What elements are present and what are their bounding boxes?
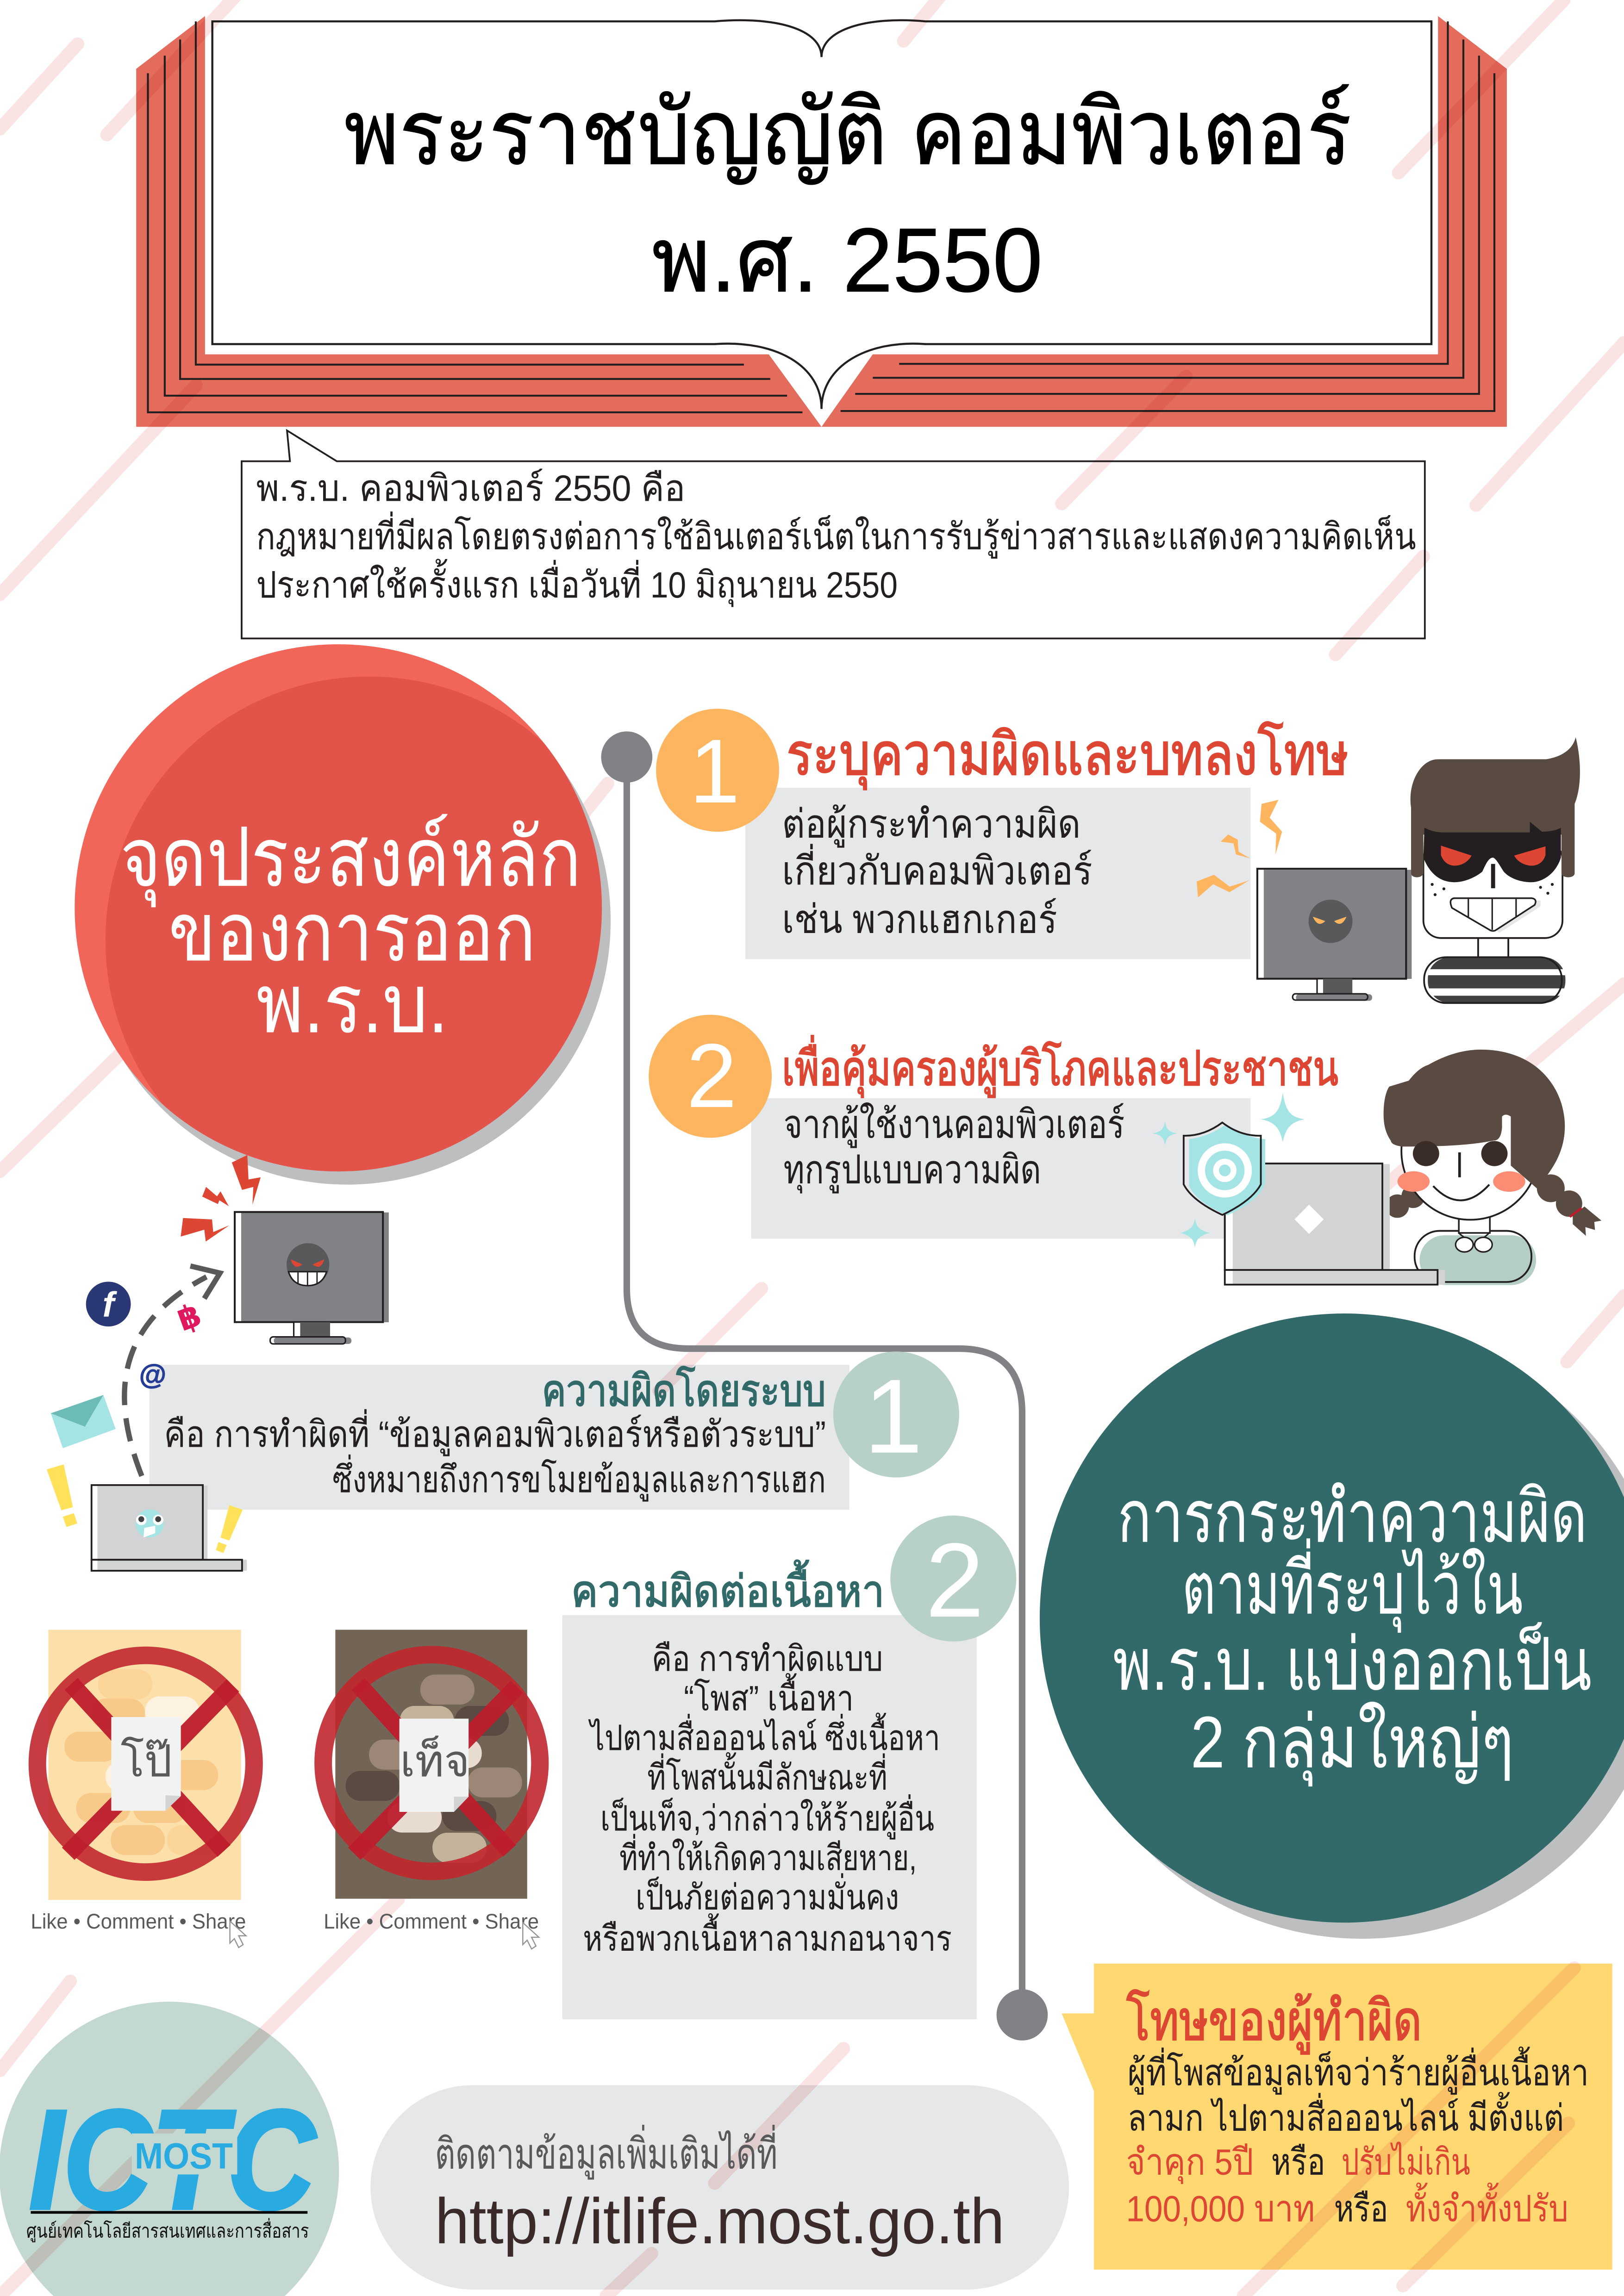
goal 2: เพื่อคุ้มครองผู้บริโภคและประชาชน [782,1035,1338,1098]
icon: red sparks [181,1155,261,1242]
offences green circle: 2 กลุ่มใหญ่ๆ [1191,1701,1514,1787]
content offence section: “โพส” เนื้อหา [684,1673,854,1718]
system offence section: คือ การทำผิดที่ “ข้อมูลคอมพิวเตอร์หรือตัวระบบ” [164,1409,826,1456]
icon: hacker monitor [1257,869,1412,1001]
goal 2: จากผู้ใช้งานคอมพิวเตอร์ [783,1102,1124,1148]
icon: attacker monitor [235,1212,389,1344]
penalty text: โทษของผู้ทำผิด [1126,1990,1422,2054]
goal 1: ระบุความผิดและบทลงโทษ [787,722,1349,790]
content offence section: เป็นภัยต่อความมั่นคง [636,1873,899,1917]
icon: envelope [51,1395,116,1448]
content offence section: คือ การทำผิดแบบ [652,1639,883,1679]
arrow: dashed attack path [125,1266,220,1476]
goal 2 [649,1015,1338,1194]
timeline connector [601,731,1048,2041]
penalty text: หรือ [1334,2188,1388,2229]
like comment share row 1: Like • Comment • Share [31,1909,246,1933]
content offence section: เป็นเท็จ,ว่ากล่าวให้ร้ายผู้อื่น [600,1794,934,1840]
goal 1: 1 [689,720,740,822]
panel: post "โป๊" prohibited: โป๊ [121,1737,172,1786]
panel: open book title [136,16,1507,427]
system offence section: ความผิดโดยระบบ [542,1366,826,1415]
logo: ICTC MOST: MOST [135,2135,233,2177]
icon: baht symbol: ฿ [173,1296,206,1338]
definition text [256,467,1416,607]
title: พระราชบัญญัติ คอมพิวเตอร์ [344,81,1352,185]
like comment share row 2 [324,1909,539,1949]
content offence section: หรือพวกเนื้อหาลามกอนาจาร [583,1913,952,1958]
like comment share row 2: Like • Comment • Share [324,1909,539,1933]
goal 1: เช่น พวกแฮกเกอร์ [782,897,1057,941]
panel: system offence box [150,1365,849,1510]
panel: definition note [242,430,1425,638]
content offence section: ที่ทำให้เกิดความเสียหาย, [619,1834,917,1878]
icon: laptop with shield [1184,1122,1445,1285]
panel: post "เท็จ" prohibited [323,1630,540,1899]
system offence section [164,1351,959,1502]
follow-us text: ติดตามข้อมูลเพิ่มเติมได้ที่ [435,2125,778,2180]
icon: facebook [86,1282,131,1326]
panel: post "โป๊" prohibited [37,1630,254,1900]
panel: post "เท็จ" prohibited: เท็จ [400,1735,470,1786]
content offence section: ความผิดต่อเนื้อหา [571,1560,885,1616]
content offence section: 2 [925,1522,984,1639]
goal 2: 2 [687,1025,737,1126]
offences green circle [1040,1313,1624,1939]
icon: at symbol: @ [139,1359,166,1390]
icon: shield and sparkles [1152,1092,1305,1248]
goal 2: ทุกรูปแบบความผิด [783,1148,1041,1194]
main purpose red circle [75,644,633,1204]
goal 1: ต่อผู้กระทำความผิด [782,803,1081,848]
content offence section: ไปตามสื่อออนไลน์ ซึ่งเนื้อหา [588,1712,940,1758]
content offence section [571,1516,1016,1958]
penalty text: ปรับไม่เกิน [1342,2141,1470,2182]
icon: victim laptop [92,1485,247,1571]
panel: follow-us pill [370,2085,1069,2290]
definition text: ประกาศใช้ครั้งแรก เมื่อวันที่ 10 มิถุนายน 2550 [256,559,898,607]
icon: orange sparks [1197,800,1282,897]
logo: ICTC MOST: ศูนย์เทคโนโลยีสารสนเทศและการสื่อสาร [26,2218,309,2242]
panel: goal 1 box [745,788,1250,959]
definition text: พ.ร.บ. คอมพิวเตอร์ 2550 คือ [256,467,685,509]
definition text: กฎหมายที่มีผลโดยตรงต่อการใช้อินเตอร์เน็ตในการรับรู้ข่าวสารและแสดงความคิดเห็น [256,511,1416,559]
main purpose red circle: พ.ร.บ. [256,958,448,1050]
content offence section: ที่โพสนั้นมีลักษณะที่ [647,1752,887,1797]
goal 1 [656,709,1349,941]
follow-us text: http://itlife.most.go.th [435,2185,1005,2257]
follow-us text [435,2125,1005,2257]
penalty text [1126,1990,1589,2229]
main purpose red circle: ของการออก [169,887,536,978]
icon: exclamation marks [47,1464,243,1553]
panel: goal 2 box [751,1098,1250,1239]
penalty text: หรือ [1271,2141,1325,2182]
icon: hacker character [1411,737,1580,1003]
panel: ICTC circle [0,2002,339,2296]
title: พ.ศ. 2550 [652,209,1043,311]
title [344,81,1352,311]
system offence section: 1 [864,1358,923,1475]
panel: content offence box [562,1615,977,2019]
system offence section: ซึ่งหมายถึงการขโมยข้อมูลและการแฮก [332,1455,826,1502]
icon: girl character [1384,1050,1601,1285]
like comment share row 1 [31,1909,246,1948]
icon: facebook: f [102,1285,117,1324]
penalty text: จำคุก 5ปี [1126,2141,1254,2184]
penalty text: ทั้งจำทั้งปรับ [1406,2183,1568,2229]
goal 1: เกี่ยวกับคอมพิวเตอร์ [782,844,1093,893]
panel: yellow penalty card [1062,1964,1612,2270]
penalty text: 100,000 บาท [1126,2188,1315,2229]
main purpose red circle: จุดประสงค์หลัก [120,812,581,908]
logo: ICTC MOST: ICTC [29,2081,316,2238]
